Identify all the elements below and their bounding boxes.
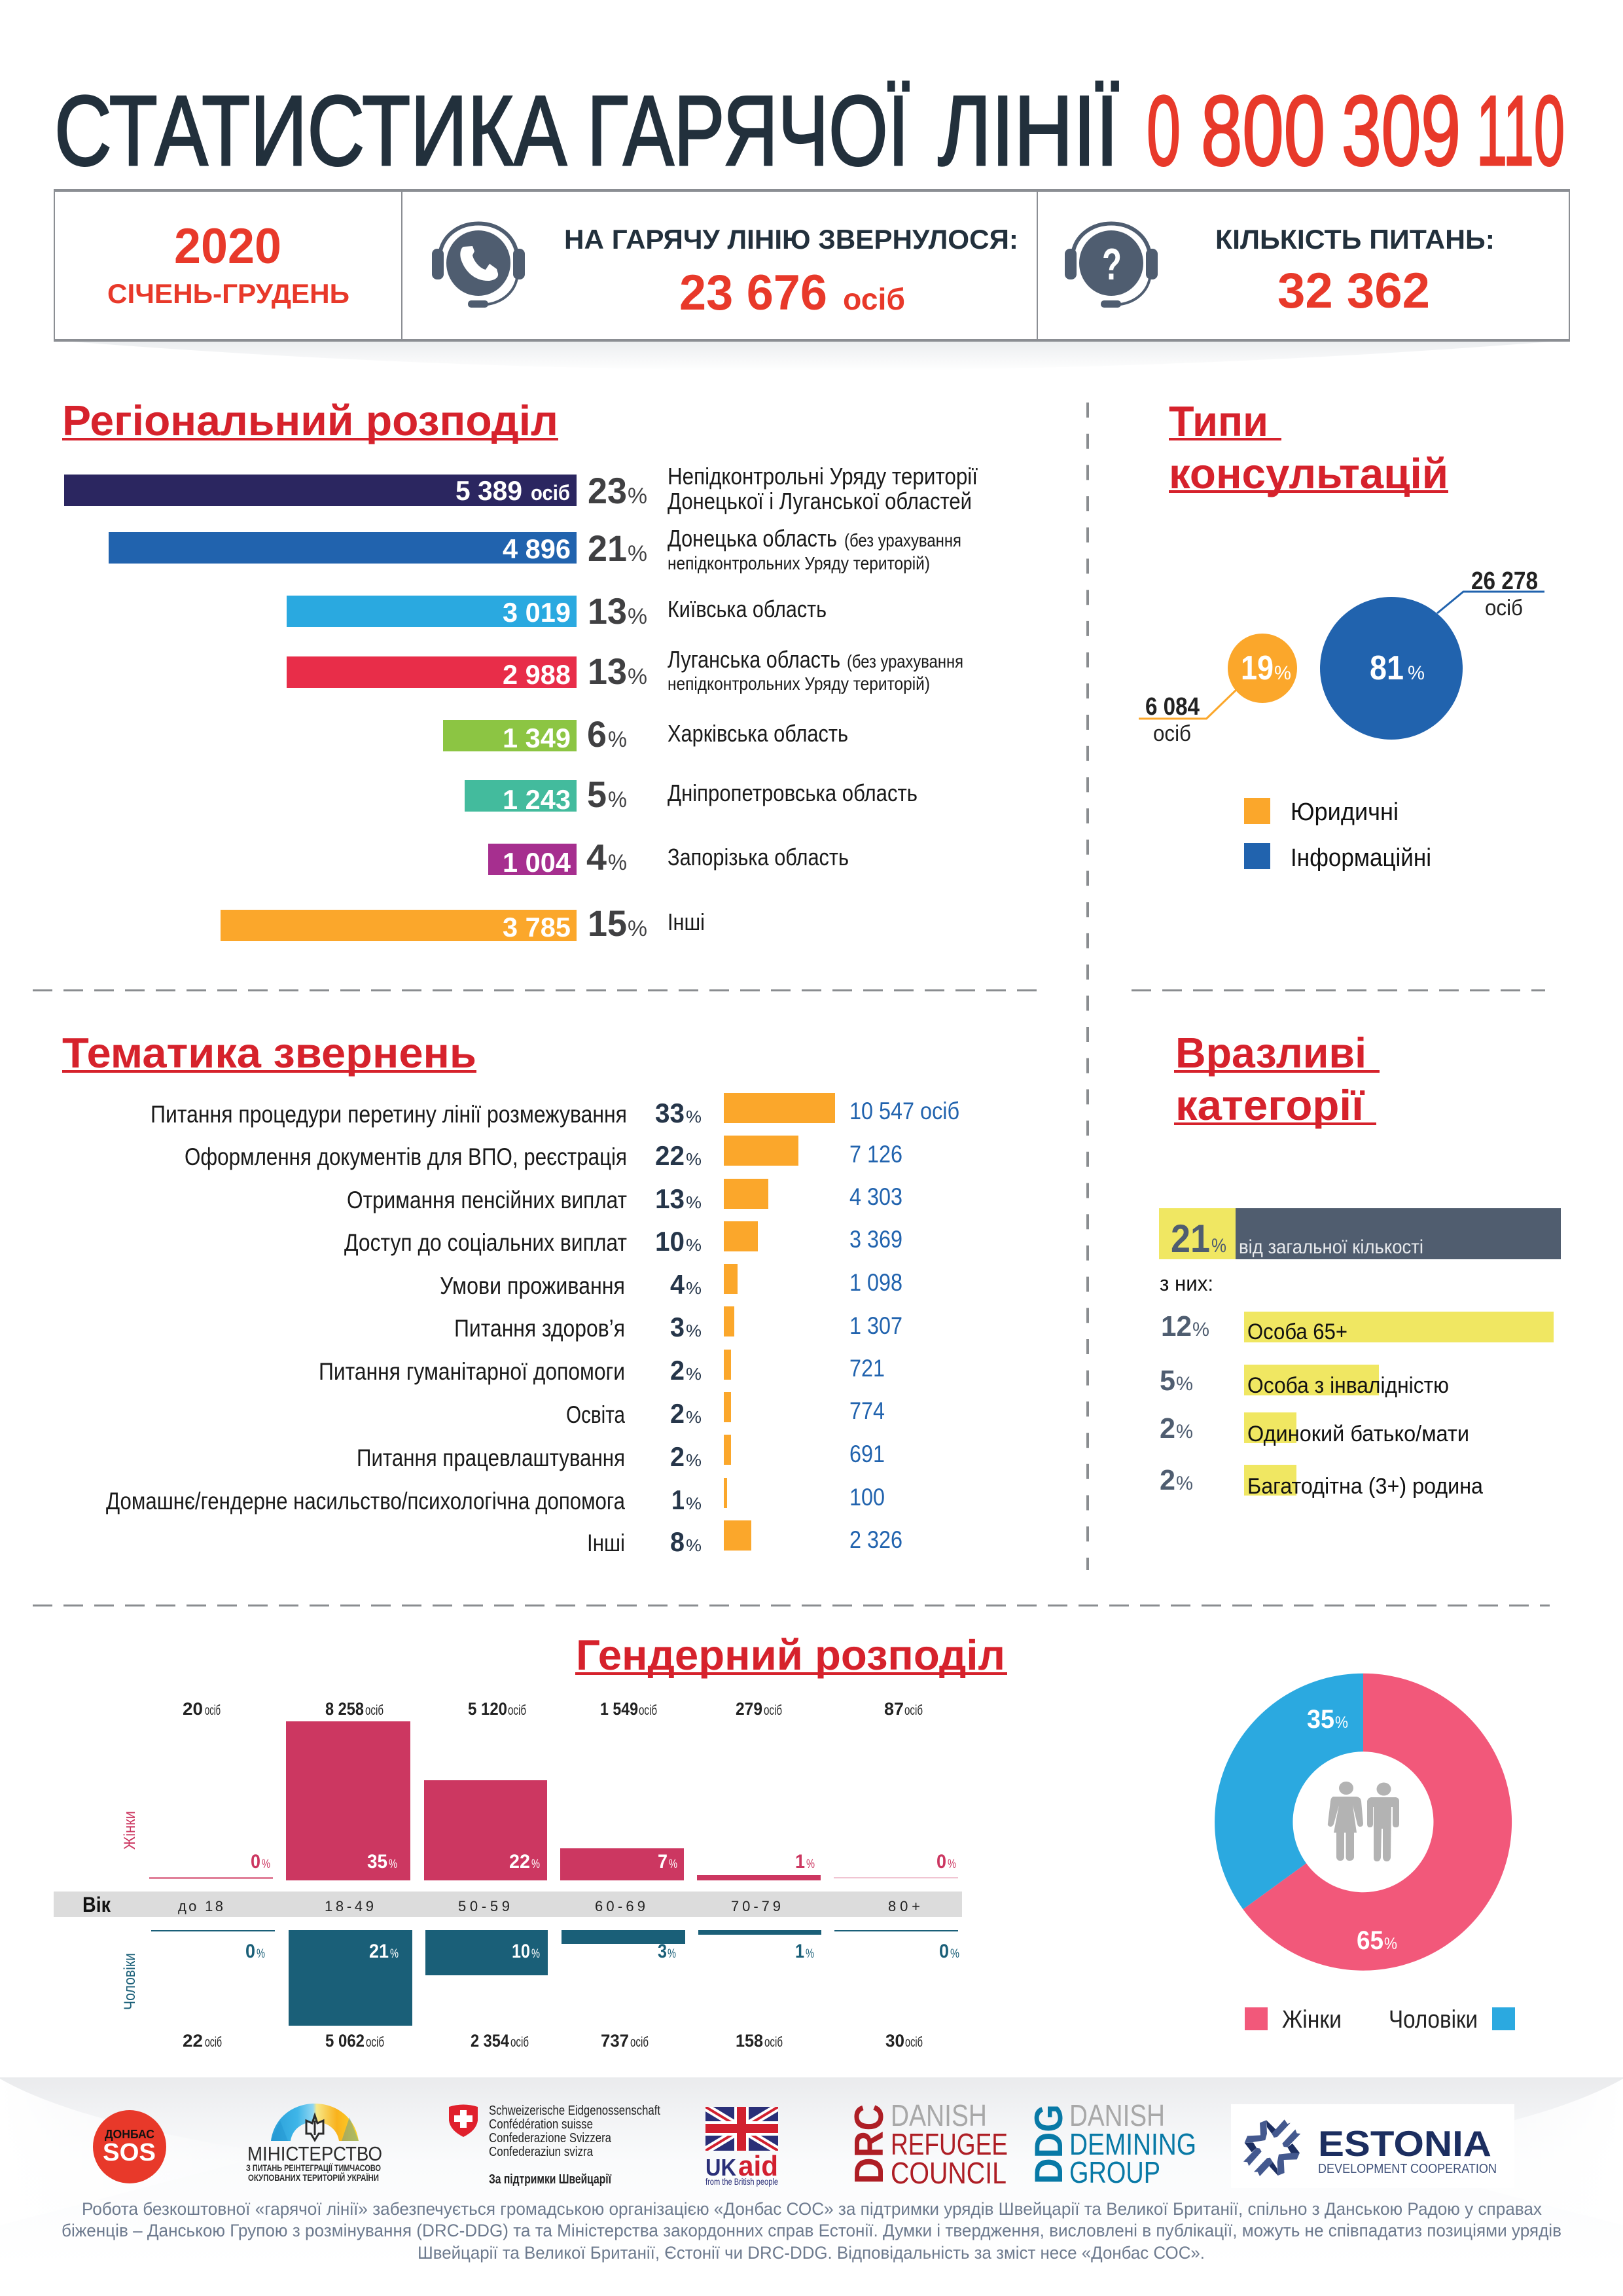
row: social payments: 3 369 [849,1226,902,1253]
age band: 18-49 [325,1898,374,1914]
title: 0 [1147,75,1181,187]
bar: other [221,903,705,944]
bar: Luhansk: 13 [588,651,627,692]
row: employment: 691 [849,1441,885,1467]
bar: uncontrolled territories: 23 [588,470,627,511]
row: crossing procedures [151,1093,959,1128]
row: disability [1160,1365,1449,1398]
period: 2020 [174,219,281,274]
bar: Dnipropetrovsk: 1 243 [503,784,571,815]
total bar [1159,1208,1561,1261]
row: humanitarian aid [319,1350,885,1386]
footer logos [93,2098,1514,2190]
chart: men by age: % [806,1947,814,1961]
bar: Kharkiv: 1 349 [503,723,571,753]
row: social payments: Доступ до соціальних виплат [344,1229,627,1256]
row: single parent: 2 [1160,1412,1175,1444]
bar: Luhansk [287,646,963,694]
row: 65+: Особа 65+ [1247,1319,1347,1344]
chart: gender donut: % [1384,1935,1397,1953]
bar: Zaporizhzhia: 1 004 [503,847,571,878]
bar: Dnipropetrovsk: % [608,787,627,812]
row: documents: 7 126 [849,1141,902,1168]
bar: Kharkiv: Харківська область [668,720,848,747]
bar: uncontrolled territories: осіб [531,481,570,505]
bar: other: 15 [588,903,627,944]
bubble: legal: % [1274,662,1291,684]
panel: gender distribution [54,1631,1515,2051]
footer background [0,2077,1623,2296]
row: documents [185,1136,902,1171]
row: social payments: % [686,1235,702,1255]
bar: Kyiv: Київська область [668,596,827,622]
chart: men by age: 158 [736,2031,763,2051]
chart: women by age: осіб [764,1703,782,1718]
row: humanitarian aid: 2 [670,1355,685,1386]
legend [1245,2006,1515,2034]
bar: Luhansk: % [628,664,647,689]
row: disability: 5 [1160,1365,1175,1397]
chart: women by age: 8 258 [325,1699,364,1719]
age band: до 18 [178,1898,223,1914]
chart: women by age: 1 [795,1851,805,1873]
chart: women by age: % [669,1857,677,1871]
bar: Kyiv: 3 019 [503,597,571,628]
chart: men by age: осіб [630,2035,649,2050]
row: domestic violence: 1 [671,1484,685,1515]
chart: women by age: осіб [508,1703,526,1718]
bar: Dnipropetrovsk: Дніпропетровська область [668,780,918,806]
row: health: % [686,1321,702,1340]
chart: women by age: осіб [904,1703,923,1718]
row: documents: Оформлення документів для ВПО, реєстрація [185,1143,627,1170]
bar: Donetsk: Донецька область [668,525,837,552]
bubble: informational: осіб [1485,596,1523,620]
chart: women by age: осіб [639,1703,657,1718]
logo: Ministry [246,2104,382,2183]
row: employment: 2 [670,1441,685,1472]
chart: gender donut: 65 [1357,1926,1383,1955]
chart: women by age: 5 120 [468,1699,507,1719]
row: living conditions: 4 [670,1269,685,1300]
bar: Kharkiv: % [608,727,627,752]
row: employment: Питання працевлаштування [357,1444,625,1471]
chart: men by age: % [668,1947,676,1961]
row: pensions: 4 303 [849,1183,902,1210]
row: crossing procedures: % [686,1107,702,1126]
title [54,75,1565,187]
chart: men by age [151,1930,959,2051]
bar: Donetsk: непідконтрольних Уряду територій) [668,553,930,573]
row: other: 8 [670,1526,685,1557]
logo: DDG: GROUP [1069,2155,1160,2189]
period [107,219,349,309]
logo: Donbas SOS: SOS [103,2139,156,2166]
logo: Switzerland: Confédération suisse [489,2117,593,2132]
chart: women by age: осіб [365,1703,383,1718]
chart: men by age: осіб [764,2035,783,2050]
row: domestic violence: 100 [849,1484,885,1511]
bar: Luhansk: непідконтрольних Уряду територій) [668,673,930,694]
legend: Інформаційні [1291,844,1431,872]
bar: Kyiv [287,590,827,632]
row: health: 3 [670,1312,685,1342]
logo: Switzerland: Confederazione Svizzera [489,2131,612,2145]
bar: Luhansk: Луганська область [668,646,840,673]
chart: women by age: % [806,1857,815,1871]
chart: men by age: 1 [795,1941,804,1962]
bubble: legal [1139,634,1297,746]
row: pensions: % [686,1193,702,1212]
row: other: % [686,1535,702,1555]
bubble: informational: % [1408,662,1425,684]
row: 65+ [1161,1310,1554,1344]
title: 309 [1342,75,1461,187]
row: crossing procedures: 33 [655,1098,685,1128]
row: living conditions: Умови проживання [440,1272,625,1299]
chart: women by age: 20 [183,1699,203,1719]
logo: Donbas SOS [93,2110,166,2183]
bar: Donetsk [109,525,961,573]
title: ЛІНІЇ [938,75,1118,187]
bar: Donetsk: (без урахування [844,530,961,550]
title: ГАРЯЧОЇ [587,75,909,187]
bar: Zaporizhzhia [488,836,849,878]
row: humanitarian aid: Питання гуманітарної допомоги [319,1358,625,1385]
bar: Luhansk: 2 988 [503,659,571,690]
logo: DRC: REFUGEE [891,2127,1008,2161]
bar: Dnipropetrovsk [465,774,918,815]
chart: men by age: 10 [512,1941,530,1962]
logo: UK aid [705,2107,778,2187]
chart: women by age: 87 [884,1699,904,1719]
chart: gender donut: 35 [1307,1705,1334,1734]
title: 800 [1201,75,1325,187]
chart: men by age: 737 [601,2031,629,2051]
text: of them: з них: [1160,1272,1213,1295]
age band: 60-69 [595,1898,645,1914]
logo: DRC: DANISH [891,2098,987,2132]
row: pensions: Отримання пенсійних виплат [347,1187,627,1213]
chart: women by age: 35 [367,1851,387,1873]
bar: Kharkiv: 6 [587,713,607,755]
bar: uncontrolled territories: % [628,484,647,509]
icon: question headset: ? [1102,240,1122,289]
row: living conditions: % [686,1278,702,1298]
panel: header stats [54,189,1570,342]
heading: Типи [1169,397,1268,445]
chart: men by age: 0 [939,1941,949,1962]
row: pensions [347,1179,902,1214]
logo: Estonia: DEVELOPMENT COOPERATION [1318,2162,1497,2176]
logo: DDG: DEMINING [1069,2127,1196,2161]
row: health [454,1306,902,1342]
bar: Donetsk: % [628,541,647,566]
logo: DDG [1027,2098,1196,2189]
chart: women by age [149,1699,958,1880]
logo: Switzerland: Confederaziun svizra [489,2145,594,2159]
row: 65+: 12 [1161,1310,1192,1342]
row: crossing procedures: 10 547 осіб [849,1098,959,1124]
age band: 80+ [888,1898,920,1914]
row: other: 2 326 [849,1526,902,1553]
chart: women by age: 22 [509,1851,530,1873]
chart: men by age: осіб [366,2035,384,2050]
men vertical label: Чоловіки [121,1953,139,2010]
row: large family [1160,1464,1483,1499]
chart: men by age: 0 [245,1941,255,1962]
chart: men by age: 2 354 [471,2031,509,2051]
row: other [587,1520,902,1557]
bar: uncontrolled territories: Донецької і Луганської областей [668,488,972,514]
legend: Юридичні [1291,798,1399,826]
logo: Switzerland: Schweizerische Eidgenossenschaft [489,2104,660,2118]
heading: категорії [1175,1081,1365,1129]
logo: Donbas SOS: ДОНБАС [105,2128,154,2141]
row: social payments [344,1221,902,1257]
text: questions: 32 362 [1277,263,1430,319]
bar: Kyiv: 13 [588,590,627,632]
logo: Ministry: З ПИТАНЬ РЕІНТЕГРАЦІЇ ТИМЧАСОВО [246,2162,381,2173]
chart: men by age: 21 [369,1941,389,1962]
row: living conditions [440,1264,902,1300]
row: crossing procedures: Питання процедури перетину лінії розмежування [151,1101,627,1128]
panel: consultation types [1139,397,1544,872]
chart: women by age: 279 [736,1699,762,1719]
chart: gender donut: % [1335,1713,1348,1732]
logo: DRC [847,2098,1008,2190]
heading: консультацій [1169,450,1448,497]
row: education: 2 [670,1398,685,1429]
chart: women by age: 7 [658,1851,668,1873]
icon: Estonia star [1243,2119,1300,2176]
total bar: від загальної кількості [1239,1236,1423,1258]
text: calls: 23 676 [679,265,827,321]
logo: Switzerland: За підтримки Швейцарії [489,2172,611,2187]
logo: UK aid: aid [738,2150,778,2182]
heading [1174,1029,1380,1129]
age band: 70-79 [731,1898,781,1914]
row: humanitarian aid: % [686,1364,702,1384]
chart: men by age: 5 062 [325,2031,365,2051]
legend [1244,798,1431,872]
row: other: Інші [587,1530,625,1556]
row: living conditions: 1 098 [849,1269,902,1296]
bar: Donetsk: 21 [588,528,627,569]
row: domestic violence: Домашнє/гендерне насильство/психологічна допомога [106,1488,625,1515]
row: single parent [1160,1412,1469,1446]
logo: Estonia: ESTONIA [1318,2123,1491,2164]
row: health: 1 307 [849,1312,902,1339]
bar: Zaporizhzhia: 4 [586,836,607,878]
logo: UK aid: UK [705,2154,736,2181]
legend: Жінки [1282,2006,1342,2034]
bar: Kyiv: % [628,604,647,629]
chart: women by age: 0 [251,1851,260,1873]
row: social payments: 10 [655,1226,685,1257]
row: education: 774 [849,1397,885,1424]
bar: uncontrolled territories [64,463,978,514]
row: disability: Особа з інвалідністю [1247,1373,1449,1398]
heading [1169,397,1448,497]
heading: Вразливі [1175,1029,1366,1077]
heading: Регіональний розподіл [62,397,558,444]
chart: men by age: 3 [658,1941,667,1962]
bar: Donetsk: 4 896 [503,533,571,564]
row: documents: 22 [655,1140,685,1171]
logo: Ministry: ОКУПОВАНИХ ТЕРИТОРІЙ УКРАЇНИ [248,2172,379,2183]
logo: DDG: DANISH [1069,2098,1165,2132]
chart: men by age: % [257,1947,265,1961]
age band [54,1892,962,1917]
chart: men by age: % [531,1947,540,1961]
panel: vulnerable categories [1159,1029,1561,1499]
text: questions [1215,224,1495,319]
text: calls [564,224,1018,321]
chart: men by age: осіб [905,2035,923,2050]
row: large family: Багатодітна (3+) родина [1247,1474,1483,1499]
row: education [566,1392,885,1429]
total bar: % [1211,1235,1226,1257]
footer disclaimer: Швейцарії та Великої Британії, Єстонії чи DRC-DDG. Відповідальність за зміст несе «Донбас СОС». [418,2243,1205,2263]
logo: DRC: DRC [847,2104,892,2184]
chart: men by age: осіб [510,2035,529,2050]
bubble: informational: 26 278 [1471,567,1538,595]
age band: Вік [82,1893,111,1916]
total bar: 21 [1171,1217,1210,1261]
bubble: informational [1320,567,1544,740]
footer disclaimer [62,2199,1561,2263]
row: employment: % [686,1450,702,1470]
logo: DDG: DDG [1027,2104,1071,2184]
bubble: legal: 6 084 [1145,693,1200,721]
chart: women by age: 1 549 [600,1699,638,1719]
bar: uncontrolled territories: 5 389 [455,475,522,506]
bubble: legal: 19 [1241,649,1274,687]
logo: Ministry: МІНІСТЕРСТВО [247,2142,382,2165]
bar: Luhansk: (без урахування [847,651,963,672]
period: СІЧЕНЬ-ГРУДЕНЬ [107,278,349,309]
chart: women by age: % [948,1857,956,1871]
bar: other: % [628,916,647,941]
text: questions: КІЛЬКІСТЬ ПИТАНЬ: [1215,224,1495,255]
bar: Dnipropetrovsk: 5 [587,774,607,815]
bubble: informational: 81 [1370,649,1404,687]
row: pensions: 13 [655,1183,685,1214]
chart: men by age: % [390,1947,399,1961]
row: documents: % [686,1149,702,1169]
row: large family: % [1176,1473,1193,1494]
chart: men by age: 30 [885,2031,904,2051]
row: single parent: % [1176,1421,1193,1443]
icon: people [1328,1782,1399,1861]
logo: Estonia [1231,2104,1514,2188]
row: health: Питання здоров’я [454,1315,625,1342]
chart: men by age: осіб [205,2035,222,2050]
chart: women by age: осіб [205,1703,221,1718]
bar: Zaporizhzhia: % [608,850,627,875]
row: large family: 2 [1160,1464,1175,1496]
chart: men by age: % [950,1947,959,1961]
row: education: % [686,1407,702,1427]
row: domestic violence [106,1478,885,1515]
legend: Чоловіки [1389,2006,1478,2034]
bar: Kharkiv [443,713,848,755]
chart: women by age: % [262,1857,270,1871]
box shadow [72,342,1551,370]
logo: Switzerland [449,2104,660,2187]
women vertical label: Жінки [121,1811,139,1850]
icon: phone headset [432,224,525,308]
chart: women by age: % [389,1857,397,1871]
text: calls: осіб [843,282,905,316]
panel: regional distribution [62,397,978,944]
chart: women by age: % [531,1857,540,1871]
chart: gender donut [1215,1674,1512,1971]
footer disclaimer: біженців – Данською Групою з розмінування (DRC-DDG) та та Міністерства закордонних справ Естонії. Думки і твердження, висловлені в публікації, можуть не співпадатиз позиціями урядів [62,2221,1561,2240]
row: employment [357,1435,885,1472]
bar: Zaporizhzhia: Запорізька область [668,844,849,870]
logo: DRC: COUNCIL [891,2156,1007,2190]
row: single parent: Одинокий батько/мати [1247,1422,1469,1446]
chart: women by age: 0 [936,1851,946,1873]
bar: other: 3 785 [503,912,571,942]
chart: men by age: 22 [183,2031,203,2051]
heading: Гендерний розподіл [576,1631,1005,1679]
age band: 50-59 [458,1898,510,1914]
logo: UK aid: from the British people [705,2176,778,2187]
bubble: legal: осіб [1153,721,1191,746]
row: disability: % [1176,1373,1193,1395]
panel: topics [62,1029,959,1557]
row: humanitarian aid: 721 [849,1355,885,1382]
row: education: Освіта [566,1401,625,1428]
row: domestic violence: % [686,1494,702,1513]
icon: question headset [1065,224,1158,308]
title: СТАТИСТИКА [54,75,567,187]
bar: uncontrolled territories: Непідконтрольні Уряду території [668,463,978,490]
heading: Тематика звернень [62,1029,476,1077]
bar: other: Інші [668,908,705,935]
footer disclaimer: Робота безкоштовної «гарячої лінії» забезпечується громадською організацією «Донбас СОС» за підтримки урядів Швейцарії та Великої Британії, спільно з Данською Радою у справах [82,2199,1542,2219]
text: calls: НА ГАРЯЧУ ЛІНІЮ ЗВЕРНУЛОСЯ: [564,224,1018,255]
row: 65+: % [1192,1319,1209,1340]
